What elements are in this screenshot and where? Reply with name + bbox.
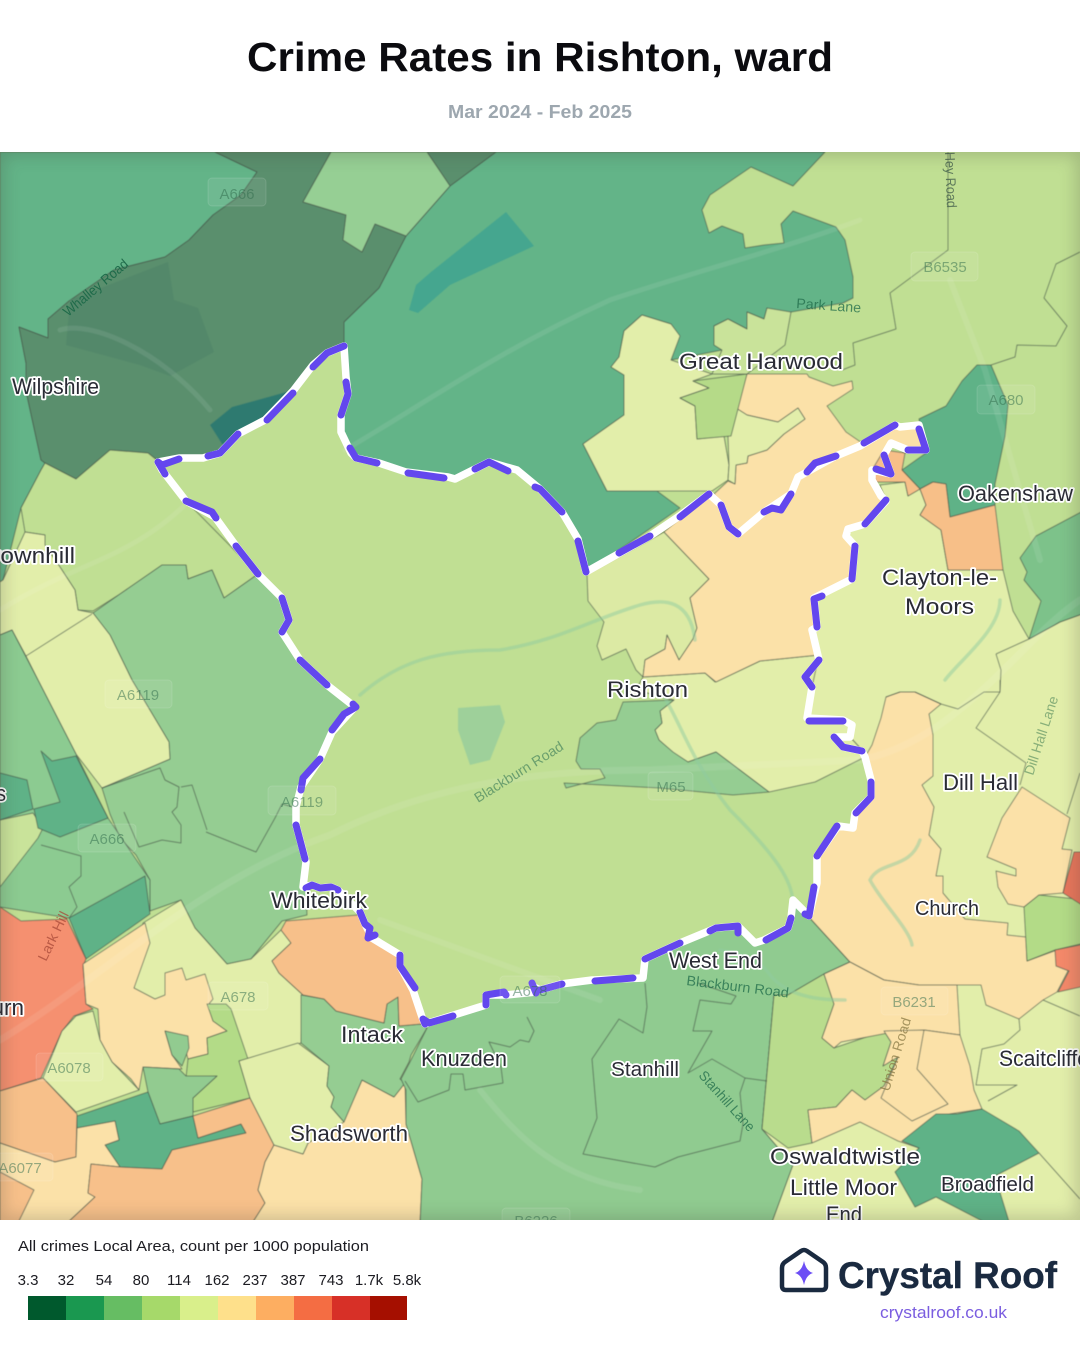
region: Union Road pale orange: [808, 1030, 982, 1148]
label: Little Moor End: Little Moor: [790, 1175, 897, 1200]
road shield: B6231: [881, 987, 948, 1015]
road name: Hey Road: Hey Road: [942, 152, 960, 208]
legend tick labels: 743: [318, 1272, 344, 1289]
region: high crime red block: [0, 907, 93, 1091]
region: mid green strip: [77, 1092, 246, 1169]
road shield: M65: [648, 772, 693, 800]
region: light north wedge: [303, 152, 450, 252]
road name: Blackburn Road south: Blackburn Road: [686, 972, 790, 1001]
region: pale orange Blackburn east: [83, 923, 227, 1090]
road shield: A680: [977, 385, 1035, 414]
place labels: [0, 349, 1080, 1227]
region: Great Harwood pale yellow: [583, 315, 729, 491]
label: Little Moor End: [790, 1175, 897, 1227]
region: Shadsworth pale yellow: [239, 1043, 344, 1154]
region: south medium green: [401, 900, 850, 1225]
boundary white casing: [158, 346, 926, 1024]
label: Broadfield: Broadfield: [941, 1174, 1034, 1196]
legend tick labels: 32: [58, 1272, 74, 1289]
road shield: B6535: [911, 252, 978, 281]
region: left yellow-green block: [0, 813, 43, 887]
legend title: All crimes Local Area, count per 1000 population: [18, 1238, 369, 1255]
road shield: A6119 west: [105, 680, 172, 708]
region: west light green: [21, 450, 258, 611]
road shield: A666 south: A666: [89, 831, 125, 848]
logo: Crystal Roof: [780, 1248, 1058, 1322]
road shield: A666 north: A666: [219, 186, 255, 203]
road shield: A666 south: [78, 824, 136, 852]
label: Clayton-le-Moors: [882, 565, 997, 619]
legend tick labels: 1.7k: [355, 1272, 384, 1289]
region: east light green block: [1024, 895, 1080, 961]
region: Church pale orange: [808, 692, 1069, 1019]
legend: [18, 1238, 422, 1320]
map regions: [0, 147, 1080, 1225]
road shield: A6119 west: A6119: [117, 687, 159, 704]
region: Harwood north light green: [712, 308, 791, 374]
title: Crime Rates in Rishton, ward: [247, 34, 833, 80]
legend tick labels: 54: [96, 1272, 112, 1289]
legend tick labels: 80: [133, 1272, 149, 1289]
region: dark corner: [427, 152, 496, 186]
legend tick labels: 114: [167, 1272, 191, 1289]
region: Great Harwood pale orange: [714, 374, 862, 534]
choropleth map: [0, 152, 1080, 1220]
region: Intack orange: [272, 915, 422, 1026]
region: pale yellow A678: [134, 900, 303, 1059]
region: pale yellow A6119: [0, 532, 170, 788]
road shield: A6078: A6078: [47, 1060, 91, 1077]
legend tick labels: 162: [204, 1272, 230, 1289]
region: Clayton and Church pale yellow: [762, 482, 1080, 1225]
label: Clayton-le-Moors: Moors: [905, 594, 974, 619]
road name: Whalley Road: Whalley Road: [60, 256, 131, 319]
label: Oakenshaw: Oakenshaw: [958, 481, 1073, 506]
darker patch in low crime area: [66, 262, 214, 376]
label: Oswaldtwistle: Oswaldtwistle: [770, 1144, 920, 1169]
region: Great Harwood light green pocket: [680, 374, 747, 439]
road shield: A6078: [36, 1053, 103, 1081]
region: north mid green: [341, 152, 853, 572]
legend tick labels: 5.8k: [393, 1272, 422, 1289]
region: small orange corner: [0, 1172, 34, 1225]
region: Rishton medium green: [564, 700, 769, 795]
region: light green pocket: [186, 1004, 250, 1112]
road shield: A678 lower: [500, 976, 560, 1003]
legend colour scale: [28, 1296, 407, 1320]
region: B6231 pale orange: [822, 962, 960, 1048]
legend tick labels: 3.3: [18, 1272, 38, 1289]
region: Oakenshaw orange: [872, 450, 1003, 570]
region: darkest low crime area: [19, 152, 406, 479]
region: orange south-west: [0, 1078, 77, 1162]
region: Shadsworth pale orange: [251, 1080, 422, 1225]
road name: Stanhill Lane: Stanhill Lane: [696, 1067, 759, 1135]
road name: Park Lane: Park Lane: [796, 295, 862, 316]
subtitle: date range: Mar 2024 - Feb 2025: [448, 102, 632, 122]
label: Whitebirk: Whitebirk: [271, 888, 368, 913]
road shield: B6226: [502, 1208, 570, 1236]
label: Great Harwood: Great Harwood: [679, 349, 843, 374]
road shield: A678: [208, 982, 268, 1010]
road name: Lark Hill: Lark Hill: [34, 909, 72, 963]
region: Great Harwood inner yellow: [728, 408, 805, 484]
label: Church: Church: [915, 898, 979, 920]
region: Rishton pale orange: [643, 425, 926, 682]
road name: Blackburn Road centre: Blackburn Road: [471, 738, 566, 806]
region: pale orange south-west: [0, 1121, 120, 1225]
region: A6078 pale yellow: [43, 1011, 139, 1112]
label: Wilpshire: Wilpshire: [12, 374, 99, 399]
road shield: B6535: B6535: [923, 259, 967, 276]
label: Knuzden: Knuzden: [421, 1046, 507, 1071]
road labels: [0, 152, 1061, 1236]
road shield: A6119 centre: A6119: [281, 794, 323, 811]
region: large orange area: [65, 1098, 274, 1225]
boundary purple dashes: [158, 346, 926, 1024]
legend tick labels: 237: [242, 1272, 268, 1289]
region: Rishton south pale yellow: [636, 655, 865, 792]
region: medium green pockets: [143, 1031, 217, 1124]
legend tick labels: 387: [280, 1272, 306, 1289]
label: Stanhill: Stanhill: [611, 1059, 679, 1081]
icon: house with star: [782, 1250, 826, 1290]
boundary and road lines: [0, 152, 1080, 1199]
legend tick labels: [18, 1272, 422, 1289]
road shield: M65: M65: [656, 779, 686, 796]
reservoir shapes: [210, 212, 534, 765]
ward boundary: Rishton: [158, 346, 926, 1024]
road shield: A6119 centre: [268, 786, 336, 815]
region: Rishton north-west pale yellow: [587, 532, 709, 677]
label: Rishton: Rishton: [607, 677, 688, 702]
region: east red blocks: [1055, 852, 1080, 992]
region: east green edge: [1020, 510, 1080, 639]
label: Intack: Intack: [341, 1022, 404, 1047]
website link text: crystalroof.co.uk: [880, 1304, 1008, 1322]
region: Intack medium green: [301, 995, 427, 1122]
label: Clayton-le-Moors: Clayton-le-: [882, 565, 997, 590]
road name: Union Road: Union Road: [877, 1016, 914, 1093]
region: left mid-green blocks: [0, 751, 150, 959]
logo wordmark: Crystal Roof: [838, 1255, 1058, 1296]
region: Broadfield mid green: [895, 1109, 1039, 1225]
region: far-left medium green: [0, 630, 150, 918]
road shield: A6077: [0, 1153, 53, 1181]
road shield: A678 lower: A678: [512, 983, 548, 1000]
label: West End: West End: [669, 948, 762, 973]
region: Oswaldtwistle light green: [762, 974, 898, 1148]
label: Shadsworth: Shadsworth: [290, 1121, 408, 1146]
region: A680 mid green: [902, 365, 1008, 517]
region: north-west green strip: [0, 152, 257, 582]
label: Dill Hall: Dill Hall: [943, 770, 1018, 795]
road shield: B6231: B6231: [892, 994, 936, 1011]
road shield: A680: A680: [988, 392, 1024, 409]
road name: Dill Hall Lane: Dill Hall Lane: [1021, 694, 1061, 777]
road shield: A666 north: [208, 178, 266, 206]
road shield: A678: A678: [220, 989, 256, 1006]
region: east pale orange: [987, 787, 1072, 907]
region: west medium green: [93, 565, 355, 964]
